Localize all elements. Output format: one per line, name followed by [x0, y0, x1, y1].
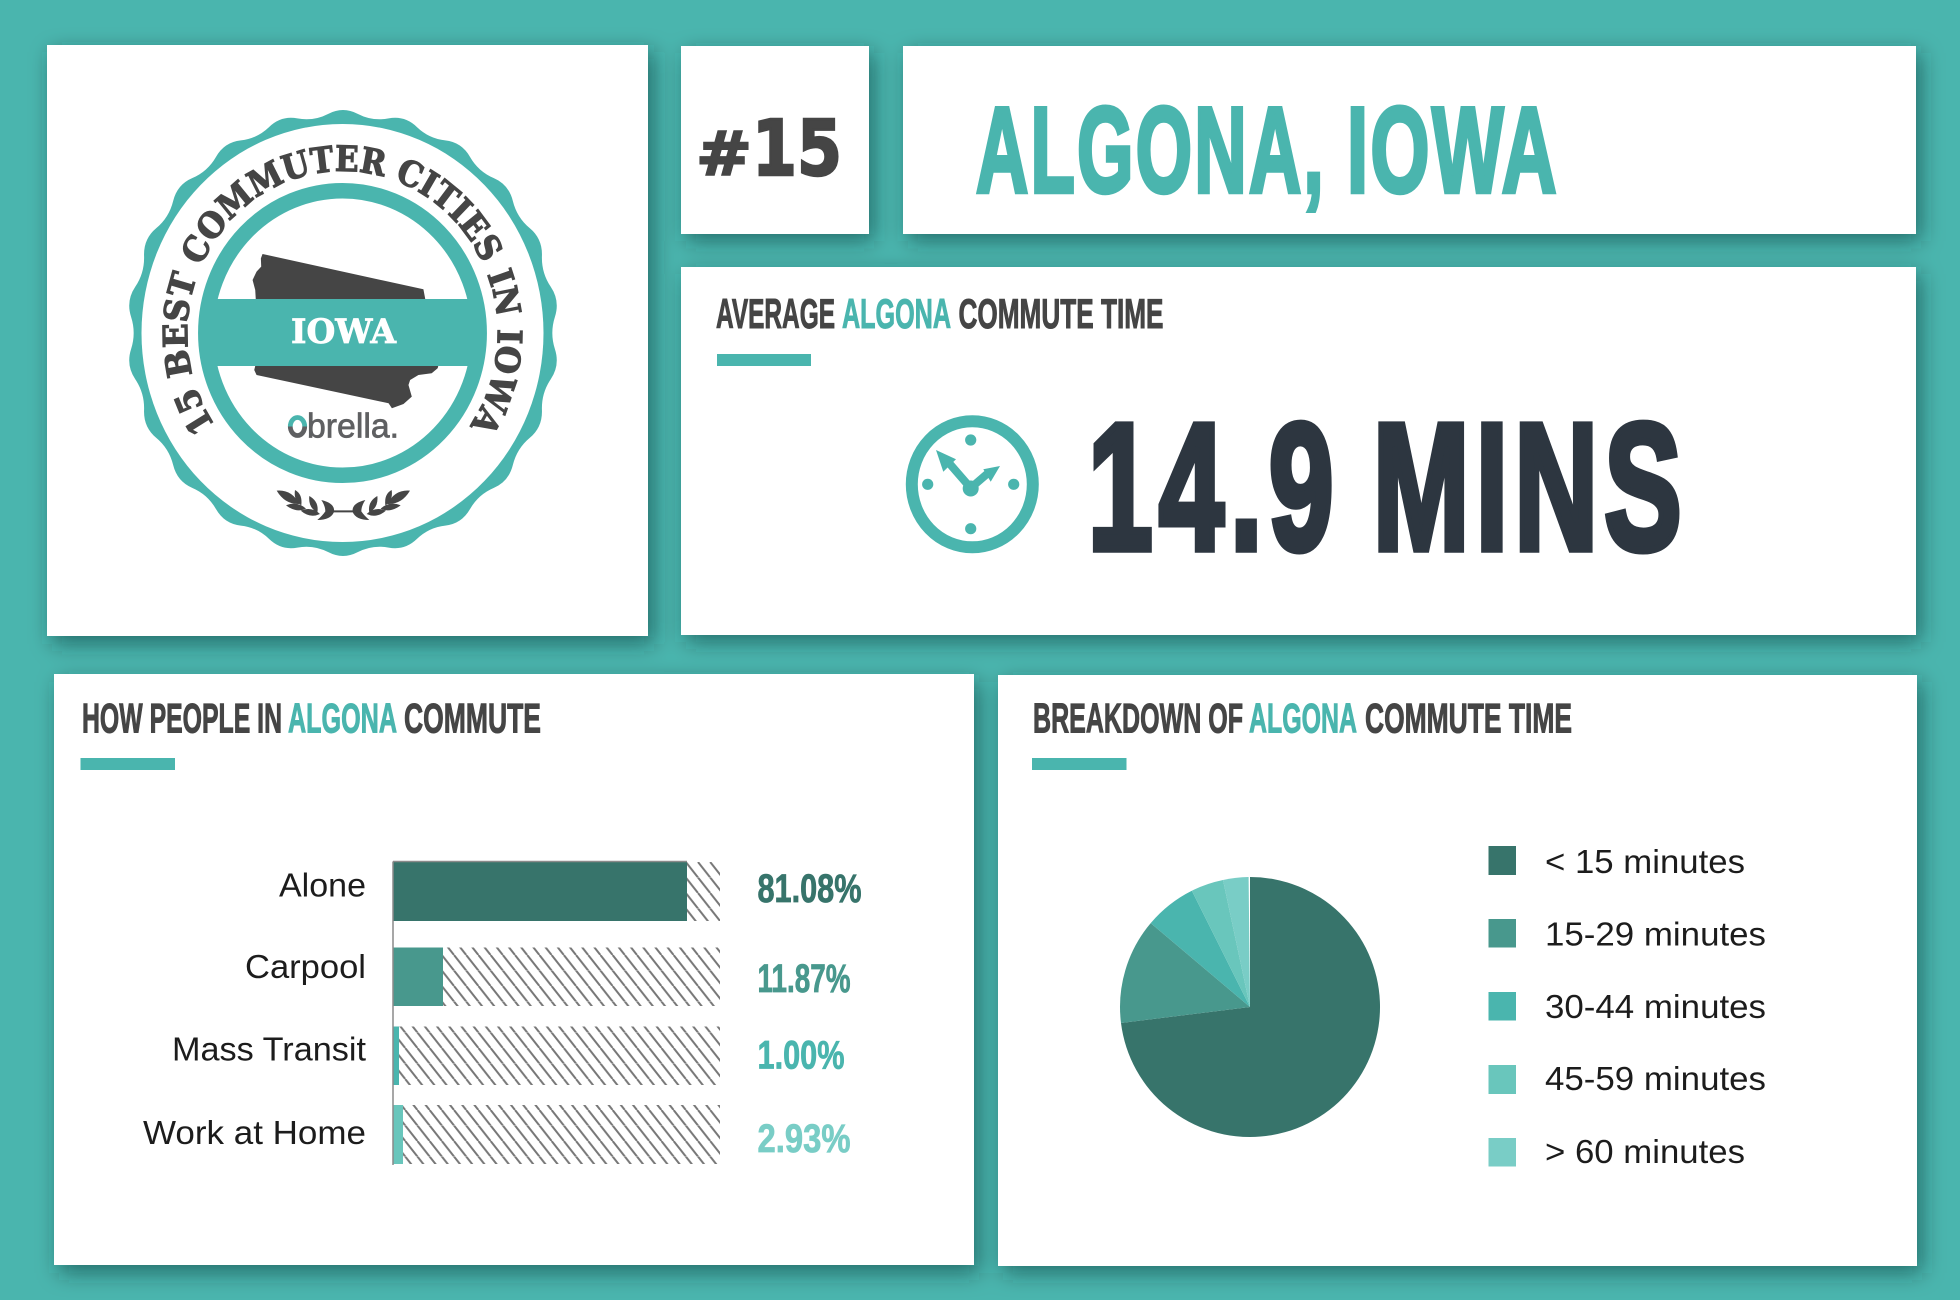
legend item: 30-44: 30-44 minutes	[1545, 989, 1766, 1026]
heading: AVERAGE	[716, 291, 835, 337]
badge inner ring	[206, 191, 479, 475]
bar: Alone: 81.08%	[758, 867, 862, 911]
bar: Work at Home: Work at Home	[143, 1115, 366, 1152]
icon: clock	[912, 421, 1033, 547]
bar chart	[143, 862, 862, 1165]
bar: Work at Home	[143, 1105, 850, 1164]
legend item: over 60: > 60 minutes	[1545, 1134, 1745, 1171]
rank number: 15	[752, 105, 842, 194]
badge ribbon	[204, 299, 481, 366]
big number: MINS	[1373, 387, 1688, 588]
logo: obrella: brella.	[307, 408, 399, 446]
heading: HOW PEOPLE IN	[82, 696, 282, 742]
big number: 14.9	[1088, 387, 1340, 588]
heading underline	[717, 354, 811, 366]
panel: how people commute	[54, 674, 974, 1265]
bar: Alone	[279, 862, 862, 921]
badge label: Iowa: IOWA	[291, 312, 397, 352]
badge curved text: 15 BEST COMMUTER CITIES IN IOWA	[162, 144, 523, 434]
icon: Iowa state map	[253, 254, 439, 408]
rank number: #	[696, 119, 752, 190]
heading: COMMUTE TIME	[1365, 696, 1572, 742]
bar: Mass Transit: 1.00%	[758, 1034, 844, 1078]
rank number	[696, 105, 842, 194]
heading underline	[80, 758, 175, 770]
panel: average commute time	[681, 267, 1916, 635]
bar: Mass Transit: Mass Transit	[172, 1032, 367, 1068]
icon: laurel	[277, 490, 410, 520]
big number	[1088, 387, 1688, 588]
legend item: 15-29: 15-29 minutes	[1545, 916, 1766, 954]
title: IOWA	[1347, 82, 1559, 218]
legend	[1488, 844, 1766, 1171]
heading	[1033, 696, 1572, 742]
title: ALGONA,	[976, 82, 1326, 218]
badge white ring	[142, 124, 544, 542]
panel: badge	[47, 45, 648, 636]
heading: ALGONA	[288, 696, 397, 742]
panel: rank	[681, 46, 869, 234]
heading: ALGONA	[1249, 696, 1357, 742]
badge: 15 best commuter cities in Iowa	[129, 110, 557, 556]
bar: Carpool: Carpool	[245, 949, 366, 986]
heading: COMMUTE	[404, 696, 541, 742]
legend item: under 15: < 15 minutes	[1545, 844, 1745, 881]
bar: Carpool	[245, 948, 850, 1006]
heading: BREAKDOWN OF	[1033, 696, 1243, 742]
pie chart	[1120, 877, 1380, 1137]
legend item: 45-59: 45-59 minutes	[1545, 1061, 1766, 1098]
panel: city title	[903, 46, 1916, 234]
bar: Work at Home: 2.93%	[758, 1117, 850, 1161]
bar: Carpool: 11.87%	[758, 957, 850, 1001]
bar: Alone: Alone	[279, 868, 366, 904]
heading: COMMUTE TIME	[958, 291, 1164, 337]
badge scalloped edge	[129, 110, 557, 556]
heading	[716, 291, 1164, 337]
bar: Mass Transit	[172, 1026, 844, 1085]
heading underline	[1032, 758, 1126, 770]
panel: commute time breakdown	[998, 675, 1917, 1266]
heading: ALGONA	[842, 291, 951, 337]
